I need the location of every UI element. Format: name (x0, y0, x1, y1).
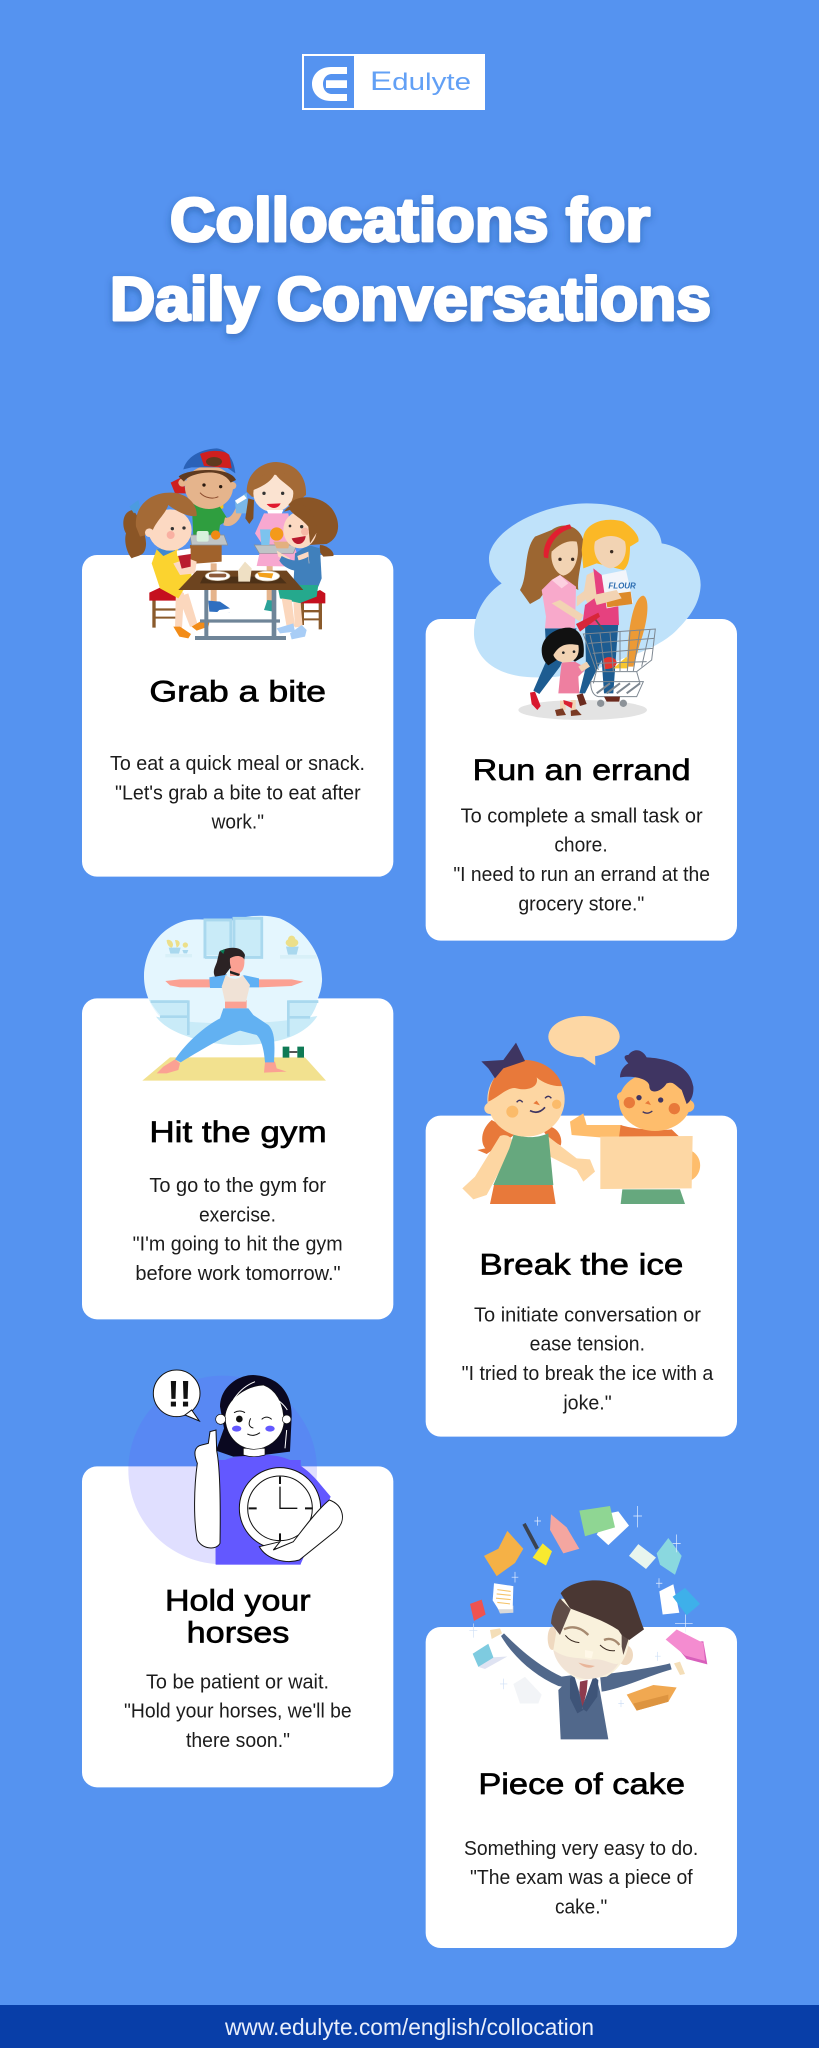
definition and example: "Let's grab a bite to eat after (115, 782, 361, 804)
definition and example: To eat a quick meal or snack. (110, 753, 365, 775)
heading: Hold your (165, 1585, 311, 1618)
definition and example (124, 1671, 352, 1752)
panel: grab a bite (82, 448, 393, 877)
heading: horses (187, 1617, 289, 1650)
footer bar: www.edulyte.com/english/collocation (224, 2014, 594, 2040)
definition and example: "The exam was a piece of (470, 1867, 693, 1889)
definition and example (110, 753, 365, 834)
panel: piece of cake (426, 1506, 737, 1948)
illustration: two children talking (462, 1016, 700, 1204)
definition and example: ease tension. (530, 1334, 645, 1356)
illustration: woman holding a clock (128, 1370, 342, 1565)
definition and example (462, 1304, 714, 1414)
heading: Run an errand (473, 754, 691, 787)
heading: Hit the gym (149, 1116, 327, 1149)
definition and example: "I need to run an errand at the (453, 864, 710, 886)
definition and example: To be patient or wait. (146, 1671, 329, 1693)
definition and example: there soon." (186, 1730, 290, 1752)
definition and example: before work tomorrow." (135, 1263, 341, 1285)
title (110, 186, 711, 333)
definition and example (453, 805, 710, 915)
heading: Grab a bite (149, 676, 326, 709)
definition and example: work." (211, 812, 264, 834)
definition and example: To initiate conversation or (474, 1304, 701, 1326)
card background (426, 1116, 737, 1437)
definition and example: "I tried to break the ice with a (462, 1363, 714, 1385)
definition and example: exercise. (199, 1204, 276, 1226)
definition and example: "Hold your horses, we'll be (124, 1701, 352, 1723)
panel: hold your horses (82, 1370, 393, 1787)
definition and example: "I'm going to hit the gym (133, 1234, 343, 1256)
heading (165, 1585, 311, 1650)
illustration: woman holding a clock: !! (167, 1374, 192, 1415)
logo: Edulyte (302, 54, 485, 110)
illustration: relaxed man with flying papers (469, 1506, 707, 1739)
heading: Break the ice (479, 1248, 683, 1281)
definition and example: To go to the gym for (149, 1175, 326, 1197)
title: Daily Conversations (110, 265, 711, 333)
heading: Piece of cake (478, 1768, 685, 1801)
panel: break the ice (426, 1016, 737, 1437)
footer bar (0, 2005, 819, 2048)
title: Collocations for (170, 186, 650, 254)
definition and example: Something very easy to do. (464, 1838, 698, 1860)
illustration: woman doing a yoga pose (142, 916, 326, 1081)
card background (82, 1466, 393, 1787)
panel: run an errand (426, 503, 737, 941)
card background (426, 619, 737, 941)
card background (82, 998, 393, 1319)
definition and example: joke." (562, 1392, 612, 1414)
illustration: children eating at a table (123, 448, 338, 640)
panel: hit the gym (82, 916, 393, 1319)
definition and example: To complete a small task or (461, 805, 703, 827)
definition and example (464, 1838, 698, 1918)
logo: Edulyte: Edulyte (370, 66, 471, 96)
illustration: family shopping with a cart (474, 503, 701, 720)
definition and example: grocery store." (518, 893, 644, 915)
definition and example (133, 1175, 343, 1285)
definition and example: chore. (554, 835, 608, 857)
illustration: family shopping with a cart: FLOUR (608, 581, 636, 590)
card background (82, 555, 393, 877)
card background (426, 1627, 737, 1948)
definition and example: cake." (555, 1896, 607, 1918)
